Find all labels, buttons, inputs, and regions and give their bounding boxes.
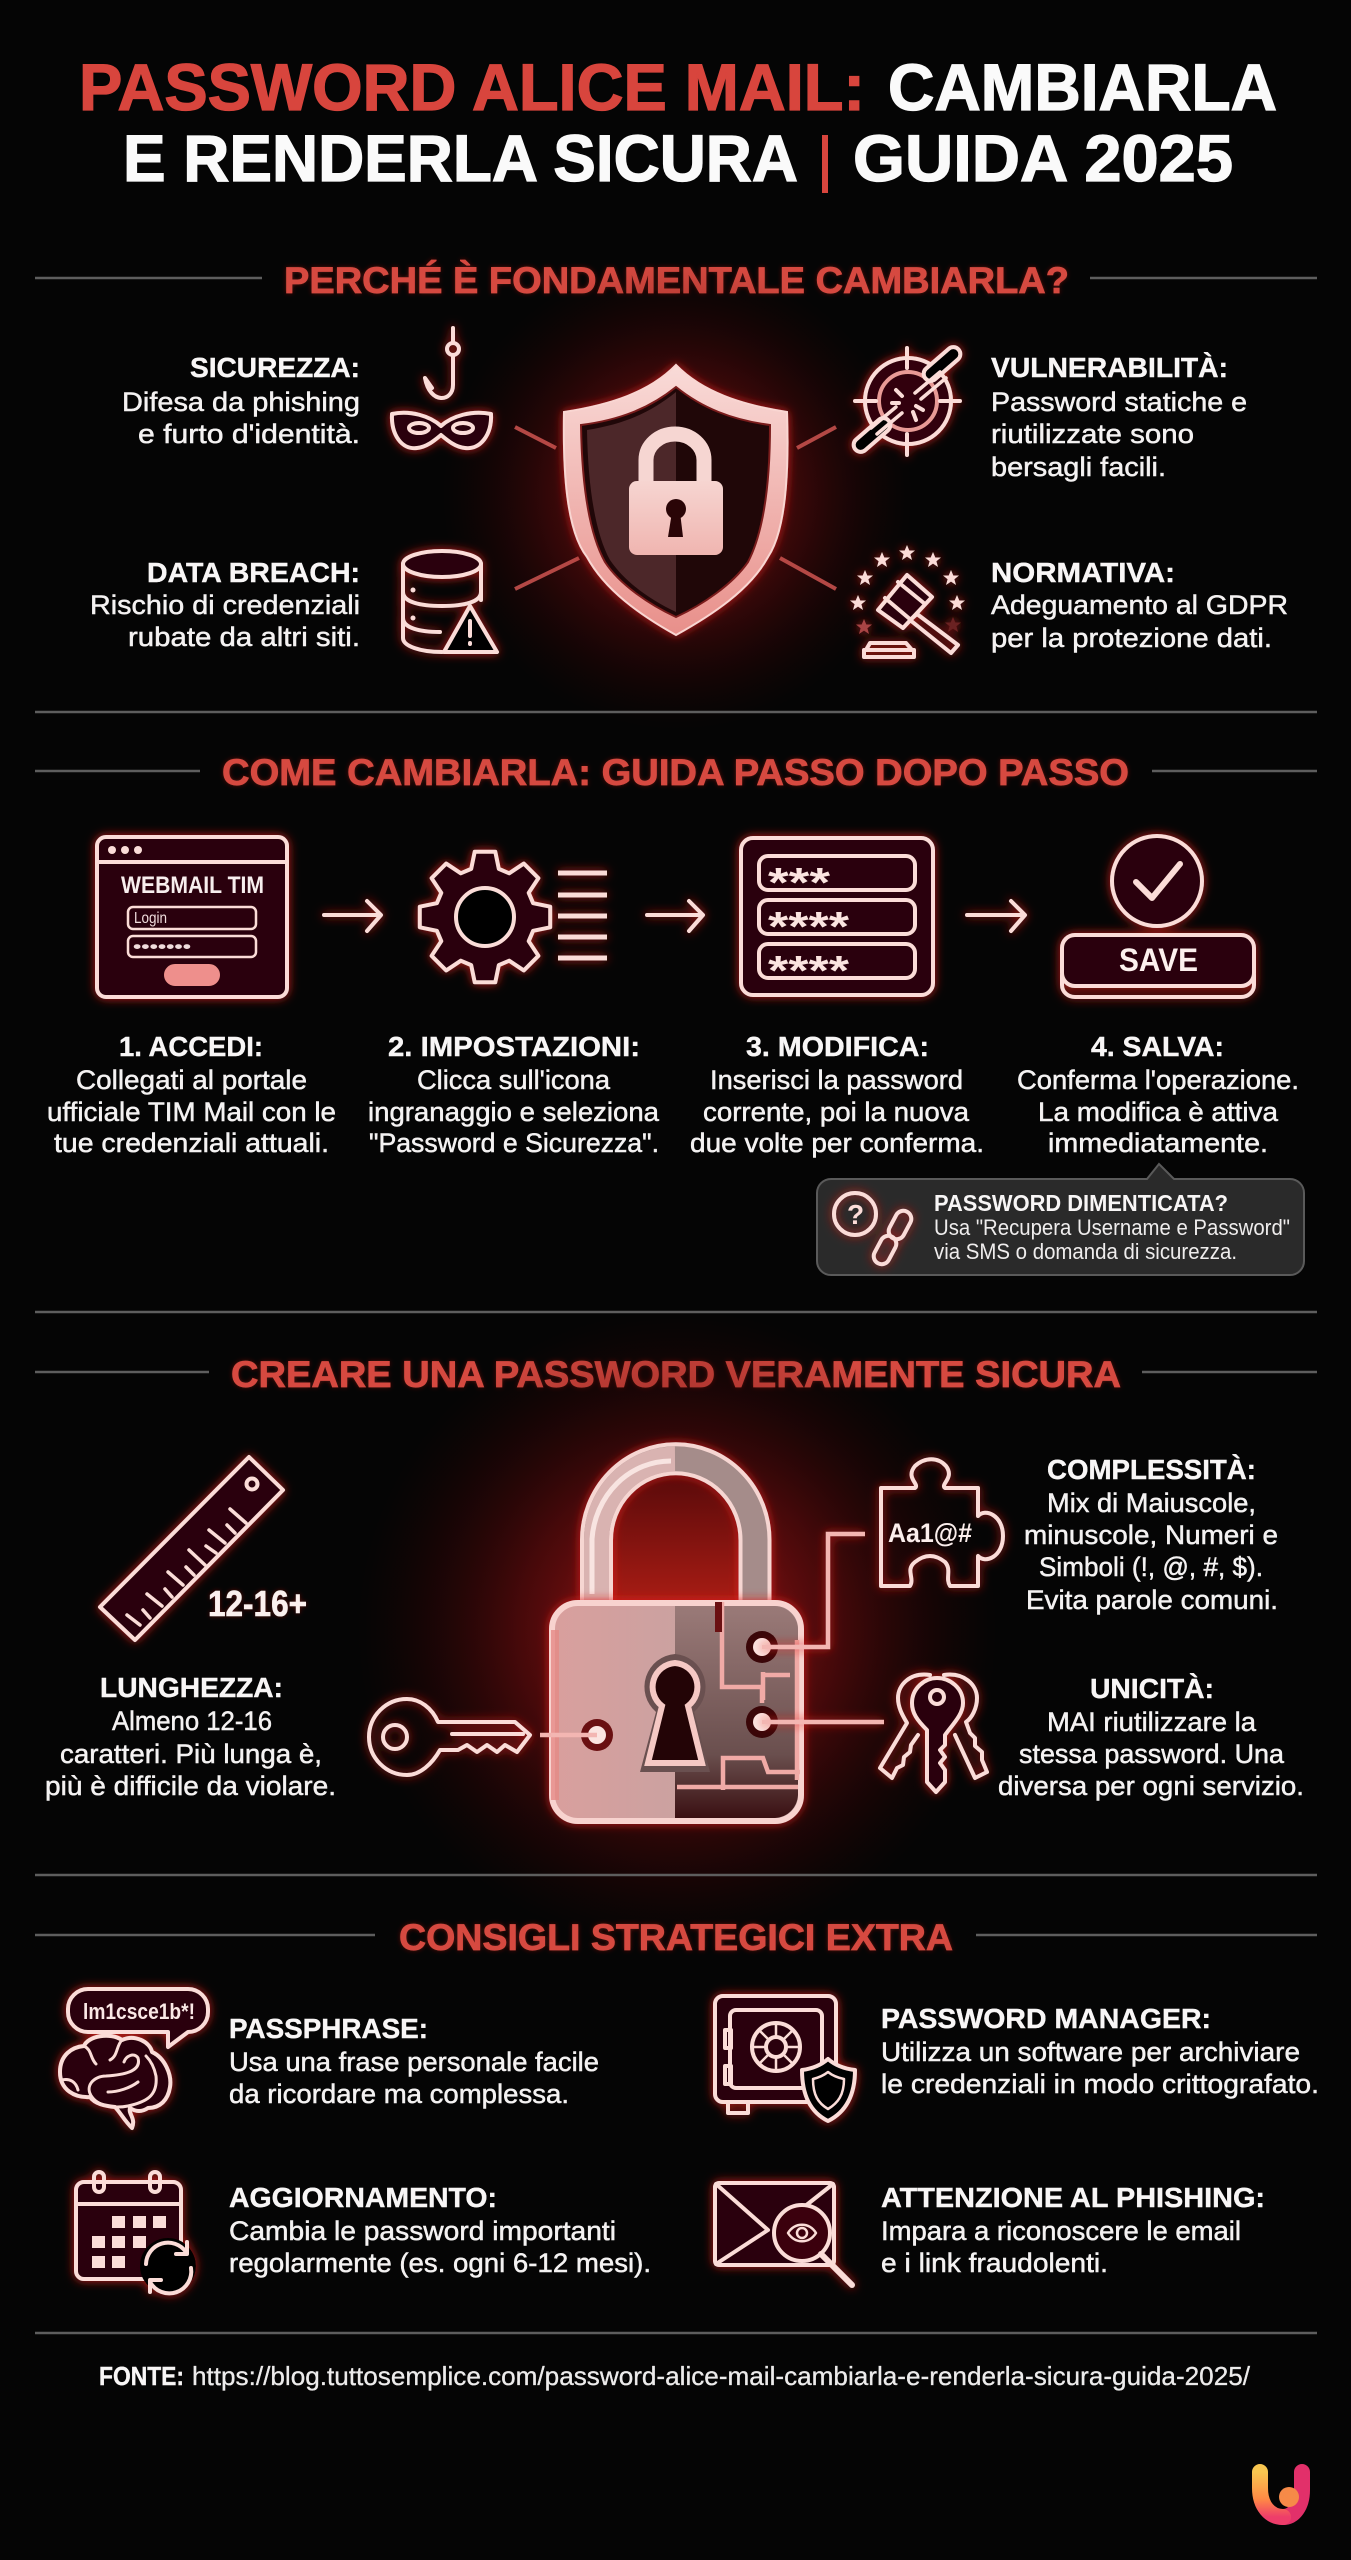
password manager text: PASSWORD MANAGER: [881, 2003, 1211, 2034]
unicità text: UNICITÀ: [1090, 1673, 1214, 1704]
data breach text: rubate da altri siti. [128, 622, 360, 652]
normativa text: Adeguamento al GDPR [991, 590, 1288, 620]
callout: password dimenticata: via SMS o domanda di sicurezza. [934, 1239, 1237, 1264]
aggiornamento text: regolarmente (es. ogni 6-12 mesi). [229, 2248, 651, 2278]
data breach text [90, 557, 360, 652]
icon: keys [880, 1675, 987, 1792]
central padlock [357, 1310, 997, 1950]
central shield with lock [442, 260, 912, 730]
data breach text: Rischio di credenziali [90, 590, 360, 620]
icon: password form: *** [768, 859, 831, 906]
password manager text: le credenziali in modo crittografato. [881, 2069, 1319, 2099]
arrow 2 [647, 901, 703, 931]
callout: password dimenticata: Usa "Recupera Username e Password" [934, 1215, 1290, 1240]
step 3 text: 3. MODIFICA: [746, 1031, 929, 1062]
title [79, 50, 1277, 195]
aggiornamento text: Cambia le password importanti [229, 2216, 616, 2246]
step 3 text [690, 1031, 984, 1158]
unicità text: diversa per ogni servizio. [998, 1771, 1304, 1801]
sicurezza text [122, 352, 360, 449]
normativa text [991, 557, 1288, 653]
title: E RENDERLA SICURA [123, 121, 798, 195]
icon: hook and mask [392, 328, 491, 448]
step 4 text [1017, 1031, 1299, 1158]
arrow 1 [324, 901, 381, 931]
lunghezza text: Almeno 12-16 [112, 1706, 272, 1736]
step 2 text: 2. IMPOSTAZIONI: [388, 1031, 640, 1062]
icon: gavel with stars [850, 545, 965, 657]
passphrase text [229, 2013, 599, 2109]
data breach text: DATA BREACH: [147, 557, 360, 588]
step 3 text: due volte per conferma. [690, 1128, 984, 1158]
attenzione phishing text: e i link fraudolenti. [881, 2248, 1108, 2278]
step 2 text: ingranaggio e seleziona [368, 1097, 660, 1127]
heading: creare una password: CREARE UNA PASSWORD VERAMENTE SICURA [231, 1354, 1121, 1395]
icon: key [369, 1699, 530, 1775]
normativa text: NORMATIVA: [991, 557, 1175, 588]
icon: webmail login window: Login [134, 910, 167, 927]
divider [35, 1874, 1317, 1876]
icon: database with warning [403, 551, 497, 652]
unicità text [998, 1673, 1304, 1801]
callout: password dimenticata: PASSWORD DIMENTICATA? [934, 1190, 1228, 1216]
complessità text: minuscole, Numeri e [1024, 1520, 1278, 1550]
title: PASSWORD ALICE MAIL: [79, 50, 865, 124]
sicurezza text: SICUREZZA: [190, 352, 360, 383]
normativa text: per la protezione dati. [991, 623, 1272, 653]
source line: https://blog.tuttosemplice.com/password-alice-mail-cambiarla-e-renderla-sicura-guida-2025/ [192, 2361, 1251, 2391]
arrow 3 [967, 901, 1025, 931]
attenzione phishing text [881, 2182, 1265, 2278]
step 4 text: Conferma l'operazione. [1017, 1065, 1299, 1095]
icon: webmail login window: ••••••• [133, 937, 191, 956]
step 3 text: Inserisci la password [710, 1065, 963, 1095]
vulnerabilità text: VULNERABILITÀ: [991, 352, 1228, 383]
attenzione phishing text: Impara a riconoscere le email [881, 2216, 1241, 2246]
complessità text: Evita parole comuni. [1026, 1585, 1278, 1615]
icon: check and save button [1062, 836, 1254, 997]
heading: perché: PERCHÉ È FONDAMENTALE CAMBIARLA? [284, 260, 1069, 301]
sicurezza text: Difesa da phishing [122, 387, 360, 417]
step 4 text: immediatamente. [1048, 1128, 1268, 1158]
divider [35, 2332, 1317, 2334]
complessità text: Mix di Maiuscole, [1047, 1488, 1256, 1518]
attenzione phishing text: ATTENZIONE AL PHISHING: [881, 2182, 1265, 2213]
callout: password dimenticata [817, 1164, 1304, 1275]
passphrase text: Usa una frase personale facile [229, 2047, 599, 2077]
complessità text: COMPLESSITÀ: [1047, 1454, 1256, 1485]
lunghezza text: più è difficile da violare. [45, 1771, 336, 1801]
icon: ruler: 12-16+ [208, 1583, 307, 1624]
vulnerabilità text [991, 352, 1247, 482]
icon: puzzle with symbols: Aa1@# [888, 1518, 972, 1548]
icon: check and save button: SAVE [1119, 942, 1198, 978]
complessità text [1024, 1454, 1278, 1615]
divider [35, 711, 1317, 713]
title: CAMBIARLA [888, 50, 1277, 124]
heading: consigli: CONSIGLI STRATEGICI EXTRA [399, 1917, 953, 1958]
icon: password form [741, 838, 933, 995]
icon: target and broken chain [851, 344, 963, 455]
step 2 text: "Password e Sicurezza". [369, 1128, 659, 1158]
passphrase text: PASSPHRASE: [229, 2013, 428, 2044]
icon: brain with speech bubble: lm1csce1b*! [83, 1999, 195, 2024]
icon: envelope with magnifier [715, 2183, 852, 2285]
callout: password dimenticata: ? [847, 1199, 864, 1230]
passphrase text: da ricordare ma complessa. [229, 2079, 569, 2109]
icon: ruler [100, 1457, 307, 1640]
complessità text: Simboli (!, @, #, $). [1039, 1552, 1263, 1582]
step 1 text: ufficiale TIM Mail con le [47, 1097, 336, 1127]
heading: come cambiarla: COME CAMBIARLA: GUIDA PASSO DOPO PASSO [222, 752, 1129, 793]
aggiornamento text: AGGIORNAMENTO: [229, 2182, 497, 2213]
step 1 text: 1. ACCEDI: [119, 1031, 263, 1062]
icon: brain with speech bubble [60, 1989, 208, 2128]
icon: calendar with refresh [76, 2172, 196, 2294]
icon: password form: **** [768, 903, 850, 950]
icon: webmail login window [97, 837, 287, 997]
lunghezza text [45, 1672, 336, 1801]
unicità text: MAI riutilizzare la [1047, 1707, 1257, 1737]
step 2 text [368, 1031, 660, 1158]
icon: puzzle with symbols [881, 1459, 1003, 1586]
password manager text [881, 2003, 1319, 2099]
logo [1260, 2472, 1302, 2517]
step 1 text [47, 1031, 336, 1158]
icon: password form: **** [768, 947, 850, 994]
step 3 text: corrente, poi la nuova [703, 1097, 970, 1127]
source line: FONTE: [99, 2361, 184, 2391]
vulnerabilità text: Password statiche e [991, 387, 1247, 417]
unicità text: stessa password. Una [1019, 1739, 1285, 1769]
step 2 text: Clicca sull'icona [417, 1065, 611, 1095]
lunghezza text: LUNGHEZZA: [100, 1672, 283, 1703]
step 4 text: 4. SALVA: [1091, 1031, 1224, 1062]
vulnerabilità text: riutilizzate sono [991, 419, 1194, 449]
step 4 text: La modifica è attiva [1038, 1097, 1279, 1127]
icon: gear with list [420, 852, 607, 982]
vulnerabilità text: bersagli facili. [991, 452, 1166, 482]
divider [35, 1311, 1317, 1313]
aggiornamento text [229, 2182, 651, 2278]
icon: webmail login window: WEBMAIL TIM [121, 872, 264, 899]
step 1 text: tue credenziali attuali. [54, 1128, 329, 1158]
sicurezza text: e furto d'identità. [138, 419, 360, 449]
lunghezza text: caratteri. Più lunga è, [60, 1739, 322, 1769]
title: GUIDA 2025 [853, 121, 1233, 195]
password manager text: Utilizza un software per archiviare [881, 2037, 1300, 2067]
icon: safe with shield [715, 1996, 855, 2121]
step 1 text: Collegati al portale [76, 1065, 307, 1095]
